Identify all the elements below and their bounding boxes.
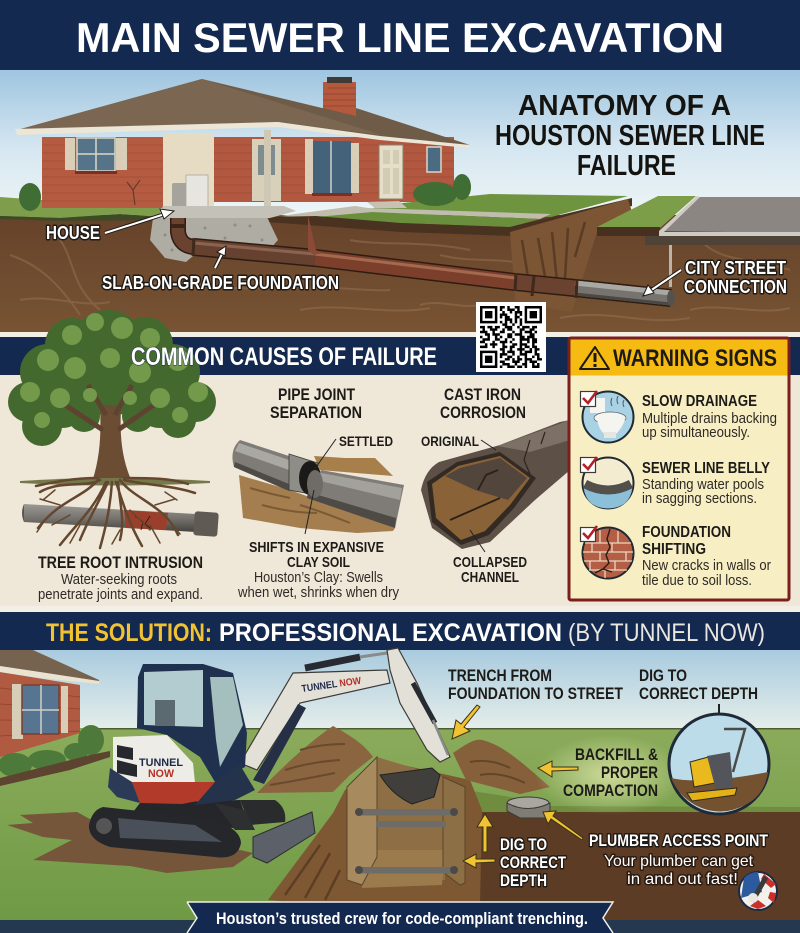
- label: trench from foundation to street: TRENCH FROM: [448, 666, 552, 685]
- panel: common causes of failure: [0, 310, 800, 606]
- heading: anatomy of a houston sewer line failure: ANATOMY OF A: [518, 90, 731, 122]
- hood logo: TUNNEL: [139, 757, 183, 769]
- tree trunk: [92, 405, 132, 482]
- house: [15, 77, 471, 211]
- text: foundation shifting: [642, 524, 771, 589]
- text: sewer line belly: [642, 460, 770, 507]
- cab: [137, 664, 247, 782]
- panel: warning signs: [569, 338, 789, 600]
- caption: tree root intrusion: penetrate joints and expand.: [38, 586, 203, 603]
- label: trench from foundation to street: [448, 666, 624, 703]
- concrete slab foundation: [150, 206, 296, 262]
- caption: shifts in expansive clay soil: SHIFTS IN EXPANSIVE: [249, 539, 384, 556]
- hood logo: NOW: [148, 768, 175, 780]
- arrow: trench depth left: [463, 854, 495, 868]
- label: backfill and proper compaction: PROPER: [601, 763, 658, 782]
- arrow: access point: [543, 811, 583, 840]
- glow behind backfill label: [535, 735, 685, 815]
- text: sewer line belly: SEWER LINE BELLY: [642, 460, 770, 477]
- label: plumber access point: in and out fast!: [627, 871, 738, 888]
- label: dig to correct depth (trench): [500, 835, 566, 890]
- caption: tree root intrusion: TREE ROOT INTRUSION: [38, 553, 203, 572]
- label: slab-on-grade foundation: SLAB-ON-GRADE FOUNDATION: [102, 273, 339, 293]
- caption: tree root intrusion: [38, 553, 203, 603]
- heading band: the solution: THE SOLUTION:: [46, 619, 212, 647]
- title banner: MAIN SEWER LINE EXCAVATION: [76, 14, 724, 61]
- label: plumber access point: Your plumber can get: [604, 853, 754, 870]
- tree canopy: [8, 310, 216, 446]
- label: plumber access point: PLUMBER ACCESS POINT: [589, 831, 769, 850]
- soil strata: [10, 240, 790, 320]
- stick arm: [387, 648, 450, 762]
- caption: shifts in expansive clay soil: [237, 490, 400, 601]
- heading band: the solution: [0, 606, 800, 650]
- heading: cast iron corrosion: [440, 385, 526, 422]
- label: backfill and proper compaction: [563, 745, 658, 800]
- caption: tree root intrusion: Water-seeking roots: [61, 571, 177, 588]
- arrow: backfill: [538, 761, 578, 777]
- icon: sagging pipe belly: [580, 457, 634, 508]
- panel: professional excavation scene: [0, 648, 800, 933]
- label: dig to correct depth (top): CORRECT DEPTH: [639, 684, 758, 703]
- label: house: [46, 209, 174, 243]
- engine hood: [113, 735, 195, 783]
- lower soil cross-section: [270, 810, 800, 920]
- small window: [427, 147, 441, 172]
- heading: pipe joint separation: SEPARATION: [270, 403, 362, 422]
- bucket: [380, 768, 440, 804]
- illustration: tree root intrusion: [8, 310, 219, 548]
- icon: cracked brick wall: [580, 526, 634, 578]
- front door and column: [252, 130, 281, 210]
- illustration: corroded cast iron pipe: [421, 420, 570, 549]
- canopy highlights: [20, 313, 208, 428]
- city street: [645, 196, 800, 287]
- label: settled: [314, 433, 393, 470]
- icon: american flag wrench badge: [739, 872, 777, 910]
- trench struts: [358, 809, 456, 874]
- label: dig to correct depth (trench): DEPTH: [500, 871, 547, 890]
- text: slow drainage: up simultaneously.: [642, 425, 750, 441]
- label: collapsed channel: CHANNEL: [461, 569, 519, 586]
- roof: [17, 79, 470, 145]
- label: dig to correct depth (top): DIG TO: [639, 666, 687, 685]
- chimney: [323, 77, 356, 116]
- heading band: the solution: (BY TUNNEL NOW): [568, 619, 765, 647]
- bare soil under excavator: [7, 812, 253, 873]
- icon: warning triangle: [580, 347, 609, 369]
- shoring boards: [347, 757, 465, 885]
- label: city street connection: [643, 258, 787, 297]
- text: slow drainage: SLOW DRAINAGE: [642, 393, 757, 410]
- left window: [65, 138, 127, 174]
- cracked pipe: [22, 504, 219, 537]
- label: collapsed channel: COLLAPSED: [453, 554, 527, 571]
- checkbox: [580, 526, 597, 542]
- heading: common causes of failure: COMMON CAUSES OF FAILURE: [131, 343, 437, 371]
- side door: [379, 145, 403, 199]
- hydraulic cylinder: [305, 657, 360, 668]
- text: slow drainage: [642, 393, 777, 441]
- label: original: ORIGINAL: [421, 433, 479, 449]
- soil mound: right: [453, 740, 550, 794]
- label: dig to correct depth (trench): CORRECT: [500, 853, 566, 872]
- sewer pipe: [171, 215, 675, 306]
- right lawn: [597, 196, 696, 228]
- icon: toilet: [580, 391, 634, 442]
- heading: cast iron corrosion: CAST IRON: [444, 385, 521, 404]
- caption: shifts in expansive clay soil: when wet, shrinks when dry: [237, 585, 400, 601]
- arrow: trench: [452, 705, 480, 739]
- label: backfill and proper compaction: BACKFILL &: [575, 745, 658, 764]
- label: collapsed channel: [453, 530, 527, 586]
- text: foundation shifting: SHIFTING: [642, 541, 706, 558]
- label: dig to correct depth (top): [639, 666, 758, 703]
- soil mound: left: [257, 726, 373, 793]
- ribbon: trusted crew: Houston’s trusted crew for code-compliant trenching.: [216, 909, 588, 928]
- access point box: [507, 797, 550, 818]
- boom logo: TUNNEL NOW: [301, 676, 362, 695]
- large picture window: [305, 139, 359, 196]
- text: sewer line belly: in sagging sections.: [642, 491, 757, 507]
- heading: anatomy of a houston sewer line failure: FAILURE: [577, 150, 676, 182]
- roots: [36, 478, 195, 548]
- title banner: [0, 0, 800, 70]
- sidewalk: [280, 206, 551, 219]
- illustration: separated pipe joint: [232, 440, 404, 533]
- inset: plate compactor: [669, 704, 769, 814]
- ribbon: trusted crew: [187, 902, 613, 933]
- icon: excavated trench cut: [510, 199, 632, 312]
- trench with shoring: [268, 757, 482, 912]
- icon: qr code: [476, 302, 546, 372]
- brick walls: [42, 137, 164, 208]
- text: slow drainage: Multiple drains backing: [642, 411, 777, 427]
- shrubs: [0, 725, 104, 777]
- label: city street connection: CITY STREET: [685, 258, 786, 278]
- red counterweight: [132, 782, 215, 804]
- hood logo: [139, 757, 183, 780]
- footer band: [0, 920, 800, 933]
- water heater and washer: [172, 175, 208, 207]
- heading: cast iron corrosion: CORROSION: [440, 403, 526, 422]
- rear track: [240, 800, 285, 825]
- undercarriage: [130, 800, 250, 830]
- label: plumber access point: [589, 831, 769, 888]
- upper lawn: [367, 194, 628, 217]
- label: trench from foundation to street: FOUNDATION TO STREET: [448, 684, 624, 703]
- label: house: HOUSE: [46, 223, 100, 243]
- label: settled: SETTLED: [339, 433, 393, 449]
- blade: [253, 812, 315, 863]
- arrow: trench depth up: [477, 814, 493, 852]
- checkbox: [580, 457, 597, 472]
- checkbox: [580, 391, 597, 406]
- heading: pipe joint separation: PIPE JOINT: [278, 385, 356, 404]
- label: slab-on-grade foundation: [102, 246, 339, 293]
- excavator: [89, 648, 450, 863]
- neighbouring house: [0, 650, 110, 786]
- text: foundation shifting: FOUNDATION: [642, 524, 731, 541]
- text: foundation shifting: tile due to soil loss.: [642, 573, 752, 589]
- track: [89, 807, 241, 857]
- caption: shifts in expansive clay soil: CLAY SOIL: [287, 554, 350, 571]
- panel: anatomy of a sewer line failure: [0, 70, 800, 333]
- heading band: the solution: PROFESSIONAL EXCAVATION: [219, 619, 562, 647]
- text: foundation shifting: New cracks in walls or: [642, 558, 771, 574]
- text: sewer line belly: Standing water pools: [642, 477, 764, 493]
- left grass strip: [0, 197, 172, 218]
- label: dig to correct depth (trench): DIG TO: [500, 835, 547, 854]
- heading: anatomy of a houston sewer line failure: [495, 90, 765, 182]
- label: backfill and proper compaction: COMPACTION: [563, 781, 658, 800]
- heading: pipe joint separation: [270, 385, 362, 422]
- caption: shifts in expansive clay soil: Houston’s Clay: Swells: [254, 570, 383, 586]
- front lawn: [316, 212, 540, 227]
- shrubs: [19, 174, 471, 211]
- boom: [240, 670, 390, 770]
